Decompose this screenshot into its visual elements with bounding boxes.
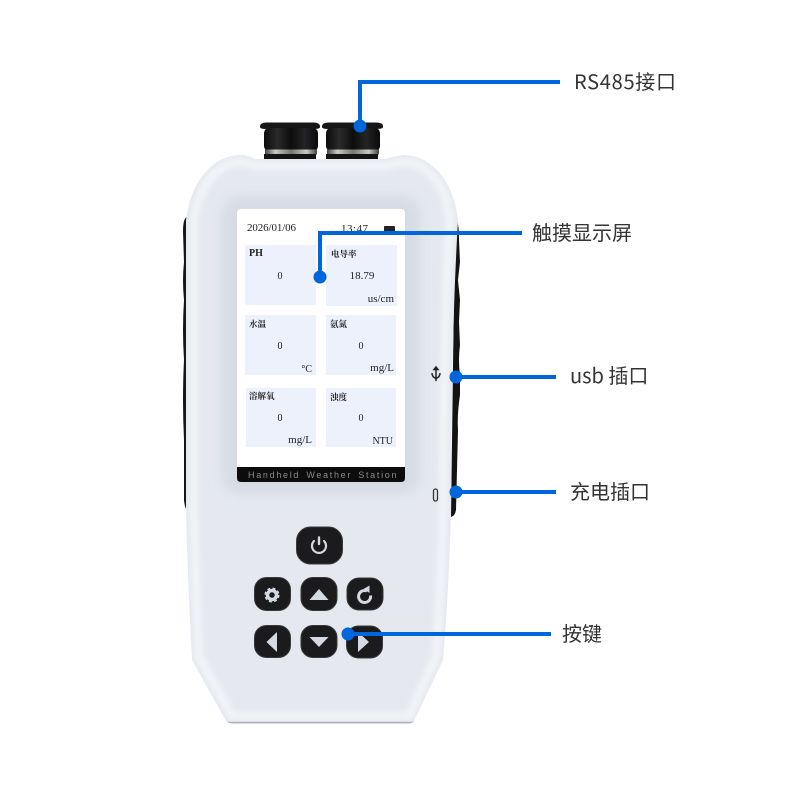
callout: usb port — [450, 360, 648, 389]
button: down — [301, 626, 337, 658]
callout: RS485 port — [354, 66, 676, 132]
cell: water temperature: 水温 — [249, 319, 267, 329]
cell: water temperature — [245, 315, 316, 375]
button: up — [301, 578, 337, 610]
side grip: left — [183, 217, 188, 511]
keypad — [254, 527, 383, 658]
cell: PH: PH — [249, 248, 263, 259]
cell: turbidity — [326, 388, 396, 447]
display screen — [237, 209, 405, 482]
cell: ammonia nitrogen: 氨氮 — [330, 319, 348, 329]
cell: conductivity — [326, 245, 397, 306]
cell: ammonia nitrogen: mg/L — [370, 362, 394, 374]
screen footer bar: Handheld Weather Station — [248, 470, 398, 480]
icon: usb — [432, 367, 440, 381]
button: right — [346, 626, 382, 658]
callout: keys: 按键 — [562, 618, 602, 647]
callout: keys — [342, 618, 602, 647]
button: settings — [254, 578, 290, 610]
button: left — [254, 626, 290, 658]
screen footer bar — [237, 467, 405, 482]
icon: charging port — [434, 489, 438, 501]
cell: dissolved oxygen: 溶解氧 — [249, 391, 275, 401]
callout: touch display — [314, 217, 632, 284]
cell: ammonia nitrogen — [326, 315, 396, 375]
cell: conductivity: 18.79 — [350, 270, 375, 282]
device body — [180, 150, 465, 730]
callout: touch display: 触摸显示屏 — [532, 217, 632, 246]
side grip: right — [451, 217, 460, 517]
cell: dissolved oxygen: mg/L — [288, 434, 312, 446]
button: power — [296, 527, 342, 564]
body shading: darker recess around screen — [222, 196, 420, 494]
cell: turbidity: 浊度 — [330, 392, 348, 402]
callout: RS485 port: RS485接口 — [574, 66, 676, 95]
button: refresh — [347, 578, 383, 610]
cell: turbidity: 0 — [358, 413, 364, 424]
cell: PH: 0 — [278, 271, 282, 282]
cell: water temperature: 0 — [278, 341, 282, 352]
cell: ammonia nitrogen: 0 — [358, 341, 364, 352]
cell: turbidity: NTU — [372, 436, 394, 447]
cell: dissolved oxygen: 0 — [278, 413, 282, 424]
cell: water temperature: °C — [301, 364, 312, 375]
callout: charging port: 充电插口 — [570, 476, 650, 505]
cell: conductivity: us/cm — [368, 293, 394, 305]
status bar — [247, 222, 395, 235]
body shading: lighter band just inside the outer edge — [194, 162, 450, 716]
status bar: 13:47 — [341, 223, 368, 235]
status bar: 2026/01/06 — [247, 222, 296, 234]
body shading: bottom edge — [226, 722, 414, 724]
connectors: RS485 ports — [260, 122, 383, 160]
callout: usb port: usb 插口 — [570, 360, 648, 389]
cell: PH — [245, 245, 316, 305]
cell: conductivity: 电导率 — [331, 249, 357, 259]
cell: dissolved oxygen — [246, 388, 316, 447]
callout: charging port — [450, 476, 650, 505]
